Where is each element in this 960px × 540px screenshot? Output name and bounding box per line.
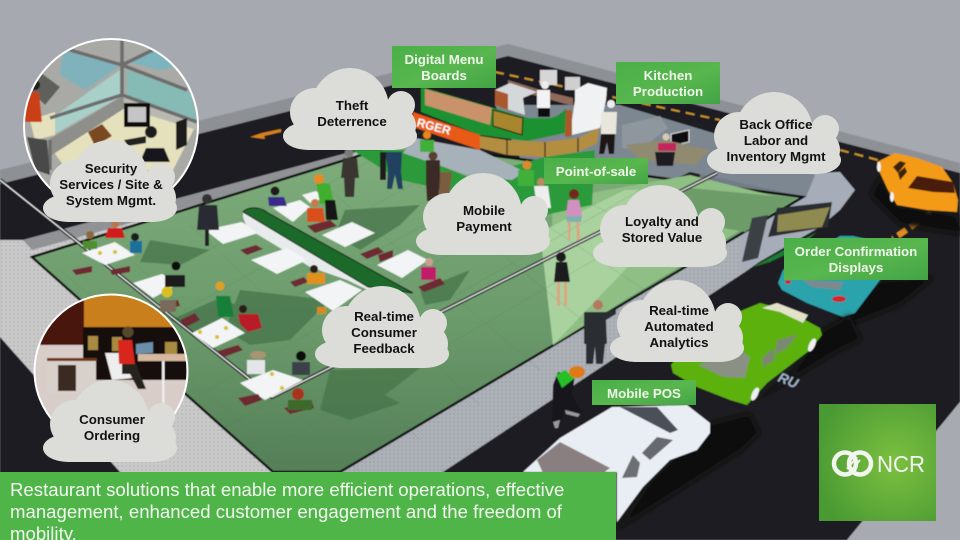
- monitor screen: [128, 107, 146, 122]
- white rear side window: [622, 455, 640, 478]
- seated orange customer: [307, 199, 325, 222]
- cloud: theft deterrence: [283, 68, 417, 150]
- white roof strip: [620, 407, 678, 433]
- yellow cap diner: [160, 286, 176, 312]
- chairs: [72, 220, 445, 414]
- side screen: [176, 118, 187, 150]
- green label: digital menu boards: [392, 46, 496, 88]
- partition highlight: [0, 173, 717, 397]
- tables: [82, 191, 428, 400]
- green label: kitchen production: [616, 62, 720, 104]
- cloud: back office: [707, 92, 841, 174]
- sign text: RGER: [415, 115, 453, 138]
- manager head: [662, 134, 670, 140]
- green shadow: [750, 315, 862, 405]
- woman green apron: [216, 282, 234, 317]
- top left dark wall: [32, 74, 60, 105]
- desk: [54, 108, 194, 170]
- teal car: [778, 236, 936, 322]
- cloud: back office: Back Office: [739, 117, 813, 132]
- spoiler: [762, 303, 808, 323]
- woman pink: [566, 189, 582, 240]
- glass pane right: [127, 70, 197, 120]
- monitor: [671, 130, 689, 146]
- staff at counter: [420, 131, 434, 152]
- car side windows: [893, 161, 906, 173]
- road arrow: [250, 129, 281, 139]
- side counter: [622, 116, 668, 150]
- suit man: [584, 300, 616, 364]
- planter green: [243, 208, 413, 293]
- cloud: real-time automated analytics: Automated: [644, 319, 714, 334]
- car side window rear: [898, 167, 907, 180]
- glass pane upper right: [131, 51, 174, 70]
- dark diner: [165, 262, 185, 287]
- NCR logo tile: [819, 404, 936, 521]
- green kiosk front: [421, 88, 566, 141]
- cloud: back office: Inventory Mgmt: [726, 149, 826, 164]
- couple at counter: [380, 152, 403, 189]
- road dashes right: [893, 213, 931, 239]
- kitchen counter back: [508, 80, 573, 106]
- cloud: mobile payment: Payment: [456, 219, 512, 234]
- green base: [352, 150, 595, 215]
- man grey: [341, 148, 359, 197]
- cloud: consumer ordering: [43, 380, 177, 462]
- light floor patch: [552, 175, 790, 345]
- cloud: real-time automated analytics: Real-time: [649, 303, 709, 318]
- wheels: [749, 337, 818, 402]
- cloud: consumer ordering: Consumer: [79, 412, 145, 427]
- glass pane left: [53, 70, 120, 135]
- side desk opening: [58, 365, 76, 391]
- green side windows: [762, 348, 775, 367]
- floor shadows: [140, 205, 470, 420]
- cloud: back office: Labor and: [744, 133, 808, 148]
- green label: order confirmation displays: [784, 238, 928, 280]
- keyboard: [124, 136, 146, 146]
- table items: [98, 250, 284, 390]
- white shadow: [617, 413, 760, 530]
- cloud: loyalty: [593, 185, 727, 267]
- fridge: [572, 83, 607, 135]
- kitchen screen one: [540, 70, 557, 85]
- kitchen appliance white: [495, 83, 537, 115]
- road dashes: [495, 72, 878, 160]
- floor grid lines: [60, 100, 720, 472]
- worker head: [33, 80, 40, 90]
- side desk: [82, 360, 97, 381]
- lighter floor patch: [540, 190, 690, 345]
- kitchen screen two: [565, 77, 580, 90]
- drive-thru letters: RU: [776, 369, 801, 392]
- desk top: [47, 358, 97, 361]
- kitchen appliance brown: [495, 90, 508, 110]
- circle ring: [24, 39, 198, 213]
- cloud: real-time consumer feedback: [315, 286, 449, 368]
- cloud: real-time consumer feedback: Consumer: [351, 325, 417, 340]
- white body: [523, 405, 710, 522]
- menu board left: [425, 89, 492, 125]
- road curb: [0, 44, 960, 186]
- green label: kitchen production: Kitchen: [644, 68, 692, 83]
- green side window front: [775, 335, 797, 355]
- circle photo: security office: [23, 38, 199, 190]
- people: [83, 100, 617, 428]
- monitor: [124, 103, 150, 127]
- seated worker head: [145, 126, 157, 138]
- person head: [122, 326, 134, 338]
- dark haired diner: [292, 351, 310, 375]
- restaurant floor: [32, 143, 803, 472]
- counter: [403, 138, 525, 180]
- person legs: [122, 364, 146, 389]
- circle ring: [34, 294, 188, 448]
- headline band: [0, 472, 616, 540]
- white side window: [642, 437, 673, 460]
- green label: kitchen production: Production: [633, 84, 703, 99]
- paved sidewalk left: [0, 150, 400, 540]
- woman standing dark: [197, 194, 219, 246]
- headline band: Restaurant solutions that enable more efficient operations, effective: [10, 479, 564, 500]
- person shirt: [118, 340, 135, 364]
- customer brown: [426, 152, 452, 201]
- car rear window: [908, 176, 955, 193]
- headline band: management, enhanced customer engagement and the freedom of: [10, 501, 563, 522]
- driveway wall: [700, 170, 812, 197]
- cloud: security services: Security: [85, 161, 138, 176]
- tail lights: [785, 280, 846, 302]
- planter: [243, 208, 413, 293]
- green label: point-of-sale: [544, 158, 648, 184]
- kitchen staff: [599, 100, 617, 154]
- green label: order confirmation displays: Order Confirmation: [795, 244, 917, 259]
- cloud: loyalty: Stored Value: [622, 230, 702, 245]
- cloud: security services: Services / Site &: [59, 177, 163, 192]
- cloud: loyalty: Loyalty and: [625, 214, 699, 229]
- cloud: security services: System Mgmt.: [66, 193, 156, 208]
- cloud: real-time automated analytics: [610, 280, 744, 362]
- drive-thru display: [742, 202, 832, 262]
- chair: [655, 152, 675, 166]
- building floor: [495, 105, 815, 200]
- laptop: [136, 342, 153, 354]
- car wheels: [877, 162, 894, 202]
- green label: order confirmation displays: Displays: [829, 260, 883, 275]
- green label: mobile pos: Mobile POS: [607, 386, 681, 401]
- photo band: [480, 128, 599, 157]
- cloud: security services: [43, 140, 177, 222]
- shelves: [83, 327, 187, 380]
- chef: [537, 81, 550, 117]
- worker orange left: [24, 92, 42, 122]
- desk left: [30, 112, 55, 140]
- logo rings: [834, 452, 871, 474]
- seated orange man: [307, 265, 326, 314]
- waiter: [314, 174, 338, 220]
- cloud: theft deterrence: Deterrence: [317, 114, 387, 129]
- circle photo: consumer ordering: [34, 294, 188, 420]
- driveway green reflection: [753, 232, 817, 267]
- cloud: mobile payment: [416, 173, 550, 255]
- orange sign: [413, 112, 480, 150]
- chair: [105, 353, 133, 380]
- diners left table: [83, 220, 142, 253]
- partition frames: [50, 40, 197, 170]
- planter wall: [243, 212, 372, 292]
- car shadow: [870, 175, 960, 235]
- road corner: [847, 402, 960, 540]
- red head diner: [288, 388, 312, 410]
- partition lower band right: [123, 96, 197, 130]
- hat diner: [247, 351, 266, 374]
- cloud: real-time automated analytics: Analytics: [649, 335, 709, 350]
- seated pink customer: [421, 258, 436, 280]
- driveway curve: [740, 172, 855, 273]
- partition wall: [0, 173, 717, 397]
- green label: digital menu boards: Digital Menu: [404, 52, 484, 67]
- diner red: [238, 305, 262, 332]
- mobile pos staff: [552, 366, 585, 428]
- books: [88, 124, 112, 146]
- green body: [671, 303, 822, 405]
- green car: [671, 303, 862, 405]
- teal window: [802, 280, 843, 290]
- menu board right: [493, 110, 523, 135]
- seated manager: [658, 143, 676, 151]
- darker floor patch: [650, 188, 795, 232]
- green label: mobile pos: [592, 380, 696, 405]
- cloud: mobile payment: Mobile: [463, 203, 505, 218]
- chair left: [27, 137, 50, 175]
- white car: [523, 405, 760, 530]
- seated worker body: [140, 148, 170, 162]
- dark wall: [40, 300, 84, 346]
- paved curb: [23, 153, 352, 250]
- photo band dividers: [507, 138, 578, 157]
- teal body: [778, 236, 885, 317]
- green windshield: [698, 352, 750, 378]
- cloud: theft deterrence: Theft: [336, 98, 369, 113]
- customer white shirt: [534, 178, 551, 208]
- kitchen: [352, 70, 607, 215]
- staff point of sale: [518, 160, 534, 186]
- teal shadow: [840, 277, 936, 322]
- partition lower band: [48, 96, 125, 155]
- cloud: real-time consumer feedback: Feedback: [353, 341, 415, 356]
- orange car: [870, 153, 960, 235]
- green label: digital menu boards: Boards: [421, 68, 467, 83]
- display image: [777, 207, 830, 232]
- back office: [622, 116, 710, 166]
- wood inner wall: [565, 110, 572, 137]
- shelf items: [88, 336, 177, 354]
- logo wordmark: NCR: [877, 451, 925, 477]
- car body: [877, 153, 958, 212]
- paved sidewalk right: [270, 190, 840, 500]
- white rear window: [537, 442, 610, 473]
- woman black dress: [554, 252, 570, 306]
- desk leg: [162, 361, 164, 403]
- floor: [36, 344, 186, 417]
- ordering kiosk post: [742, 215, 768, 262]
- display screen: [768, 202, 832, 237]
- glass pane upper left: [60, 50, 120, 90]
- cloud: consumer ordering: Ordering: [84, 428, 140, 443]
- green label: point-of-sale: Point-of-sale: [556, 164, 636, 179]
- room background: [83, 296, 173, 328]
- desk: [625, 140, 710, 165]
- main desk: [138, 354, 188, 361]
- seated purple customer: [268, 186, 287, 206]
- cloud: real-time consumer feedback: Real-time: [354, 309, 414, 324]
- office background: [25, 40, 197, 187]
